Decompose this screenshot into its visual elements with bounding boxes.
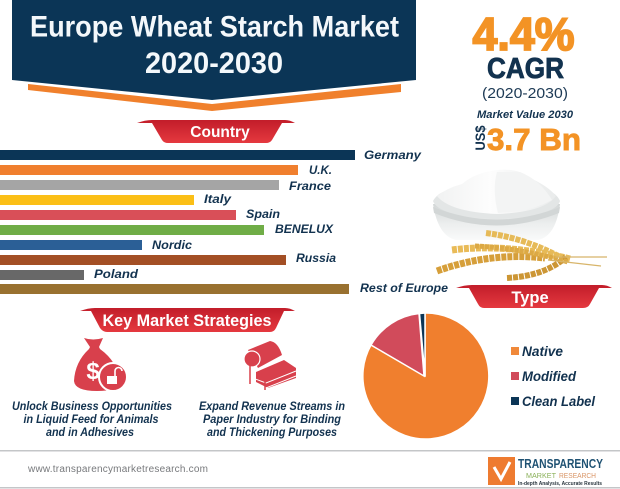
transparency market research logo: In-depth Analysis, Accurate Results — [518, 481, 602, 487]
bar labels — [94, 148, 448, 295]
CAGR statistics: 3.7 Bn — [487, 122, 581, 157]
bowl — [433, 170, 560, 240]
strategy text: paper industry: and Thickening Purposes — [207, 427, 337, 439]
bar labels: Nordic — [152, 238, 192, 252]
strategy text: liquid feed and adhesives: in Liquid Feed for Animals — [24, 414, 158, 426]
illustration: bowl of starch with wheat — [433, 170, 607, 278]
bar labels: Poland — [94, 267, 139, 281]
bar labels: Spain — [246, 207, 280, 221]
strategy text: paper industry: Expand Revenue Streams in — [199, 401, 345, 413]
strategy text: paper industry: Paper Industry for Binding — [203, 414, 341, 426]
CAGR statistics: (2020-2030) — [482, 85, 568, 102]
key market strategies ribbon heading — [80, 308, 295, 332]
bar labels: Italy — [204, 192, 232, 206]
strategy text: liquid feed and adhesives: and in Adhesives — [46, 427, 134, 439]
CAGR statistics: US$ — [472, 125, 488, 150]
pie legend — [511, 344, 595, 409]
strategy text: paper industry — [199, 401, 345, 439]
transparency market research logo — [488, 456, 603, 487]
transparency market research logo: RESEARCH — [559, 473, 596, 480]
transparency market research logo: MARKET — [526, 473, 557, 480]
pie legend: Modified — [522, 369, 577, 384]
bar labels: Germany — [364, 148, 422, 162]
CAGR statistics: CAGR — [487, 53, 564, 85]
CAGR statistics: Market Value 2030 — [477, 109, 574, 121]
title text — [30, 10, 399, 80]
icon: money bag with lock: $ — [86, 358, 100, 385]
strategy text: liquid feed and adhesives — [12, 401, 172, 439]
title text: 2020-2030 — [145, 47, 283, 80]
title text: Europe Wheat Starch Market — [30, 10, 399, 44]
CAGR statistics — [472, 8, 581, 157]
country ribbon heading — [137, 120, 295, 143]
country ribbon heading: Country — [190, 124, 250, 141]
bar labels: Russia — [296, 251, 336, 265]
bar labels: BENELUX — [275, 222, 334, 236]
icon: paper roll and sheets — [244, 341, 296, 390]
bar labels: U.K. — [309, 163, 332, 177]
key market strategies ribbon heading: Key Market Strategies — [102, 311, 272, 330]
bar chart: country — [0, 148, 448, 295]
title banner — [12, 0, 416, 111]
type ribbon heading — [456, 285, 612, 308]
strategy text: liquid feed and adhesives: Unlock Business Opportunities — [12, 401, 172, 413]
CAGR statistics: 4.4% — [472, 8, 574, 60]
wheat ears — [437, 233, 607, 278]
footer website url: www.transparencymarketresearch.com — [27, 464, 208, 475]
pie legend: Native — [522, 344, 563, 359]
bar labels: Rest of Europe — [360, 281, 448, 295]
pie legend: Clean Label — [522, 394, 595, 409]
icon: money bag with lock — [74, 338, 127, 391]
type ribbon heading: Type — [511, 289, 549, 307]
pie chart: type — [363, 313, 489, 439]
bar labels: France — [289, 179, 331, 193]
